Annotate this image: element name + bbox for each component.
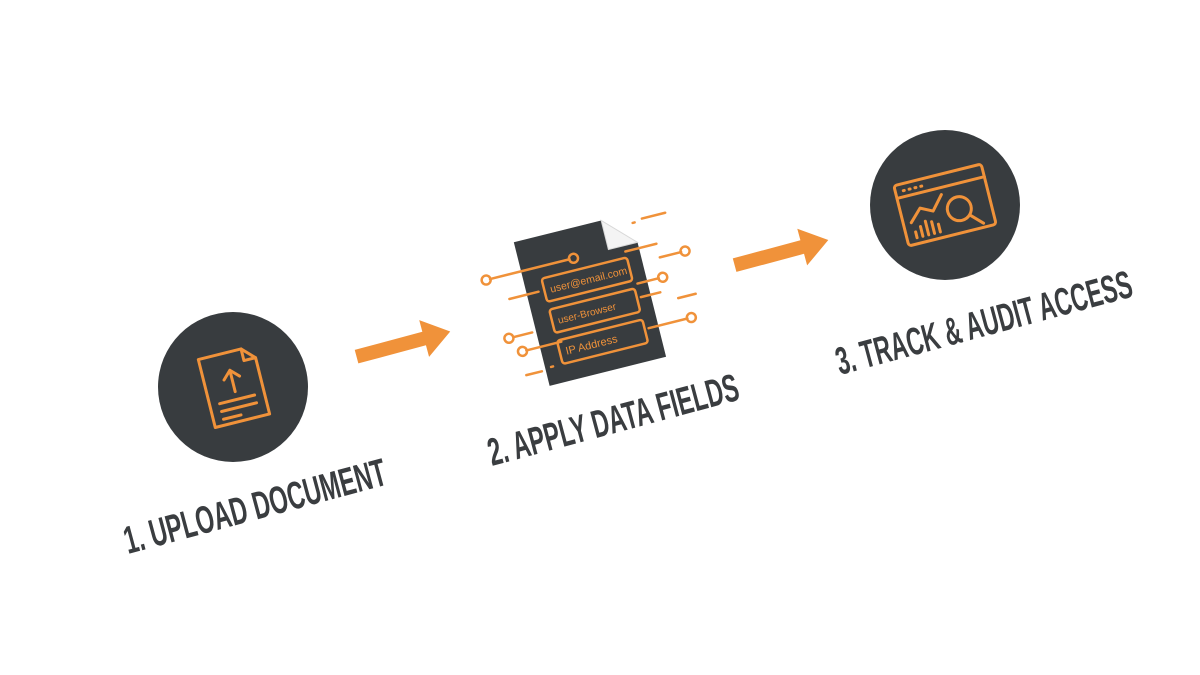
step 1 icon: upload document circle: [158, 312, 308, 462]
step 2 icon: document with data fields: user-Browser: [557, 301, 618, 327]
step 1 label: 1. UPLOAD DOCUMENT: [119, 451, 391, 563]
arrow 1: [352, 313, 455, 375]
step 2 label: 2. APPLY DATA FIELDS: [483, 366, 744, 475]
step 3 icon: analytics magnifier circle: [870, 130, 1020, 280]
step 2 icon: document with data fields: user@email.com: [549, 265, 629, 296]
step 2 icon: document with data fields: [475, 201, 713, 396]
step 2 icon: document with data fields: IP Address: [564, 333, 619, 358]
arrow 2: [730, 222, 833, 284]
